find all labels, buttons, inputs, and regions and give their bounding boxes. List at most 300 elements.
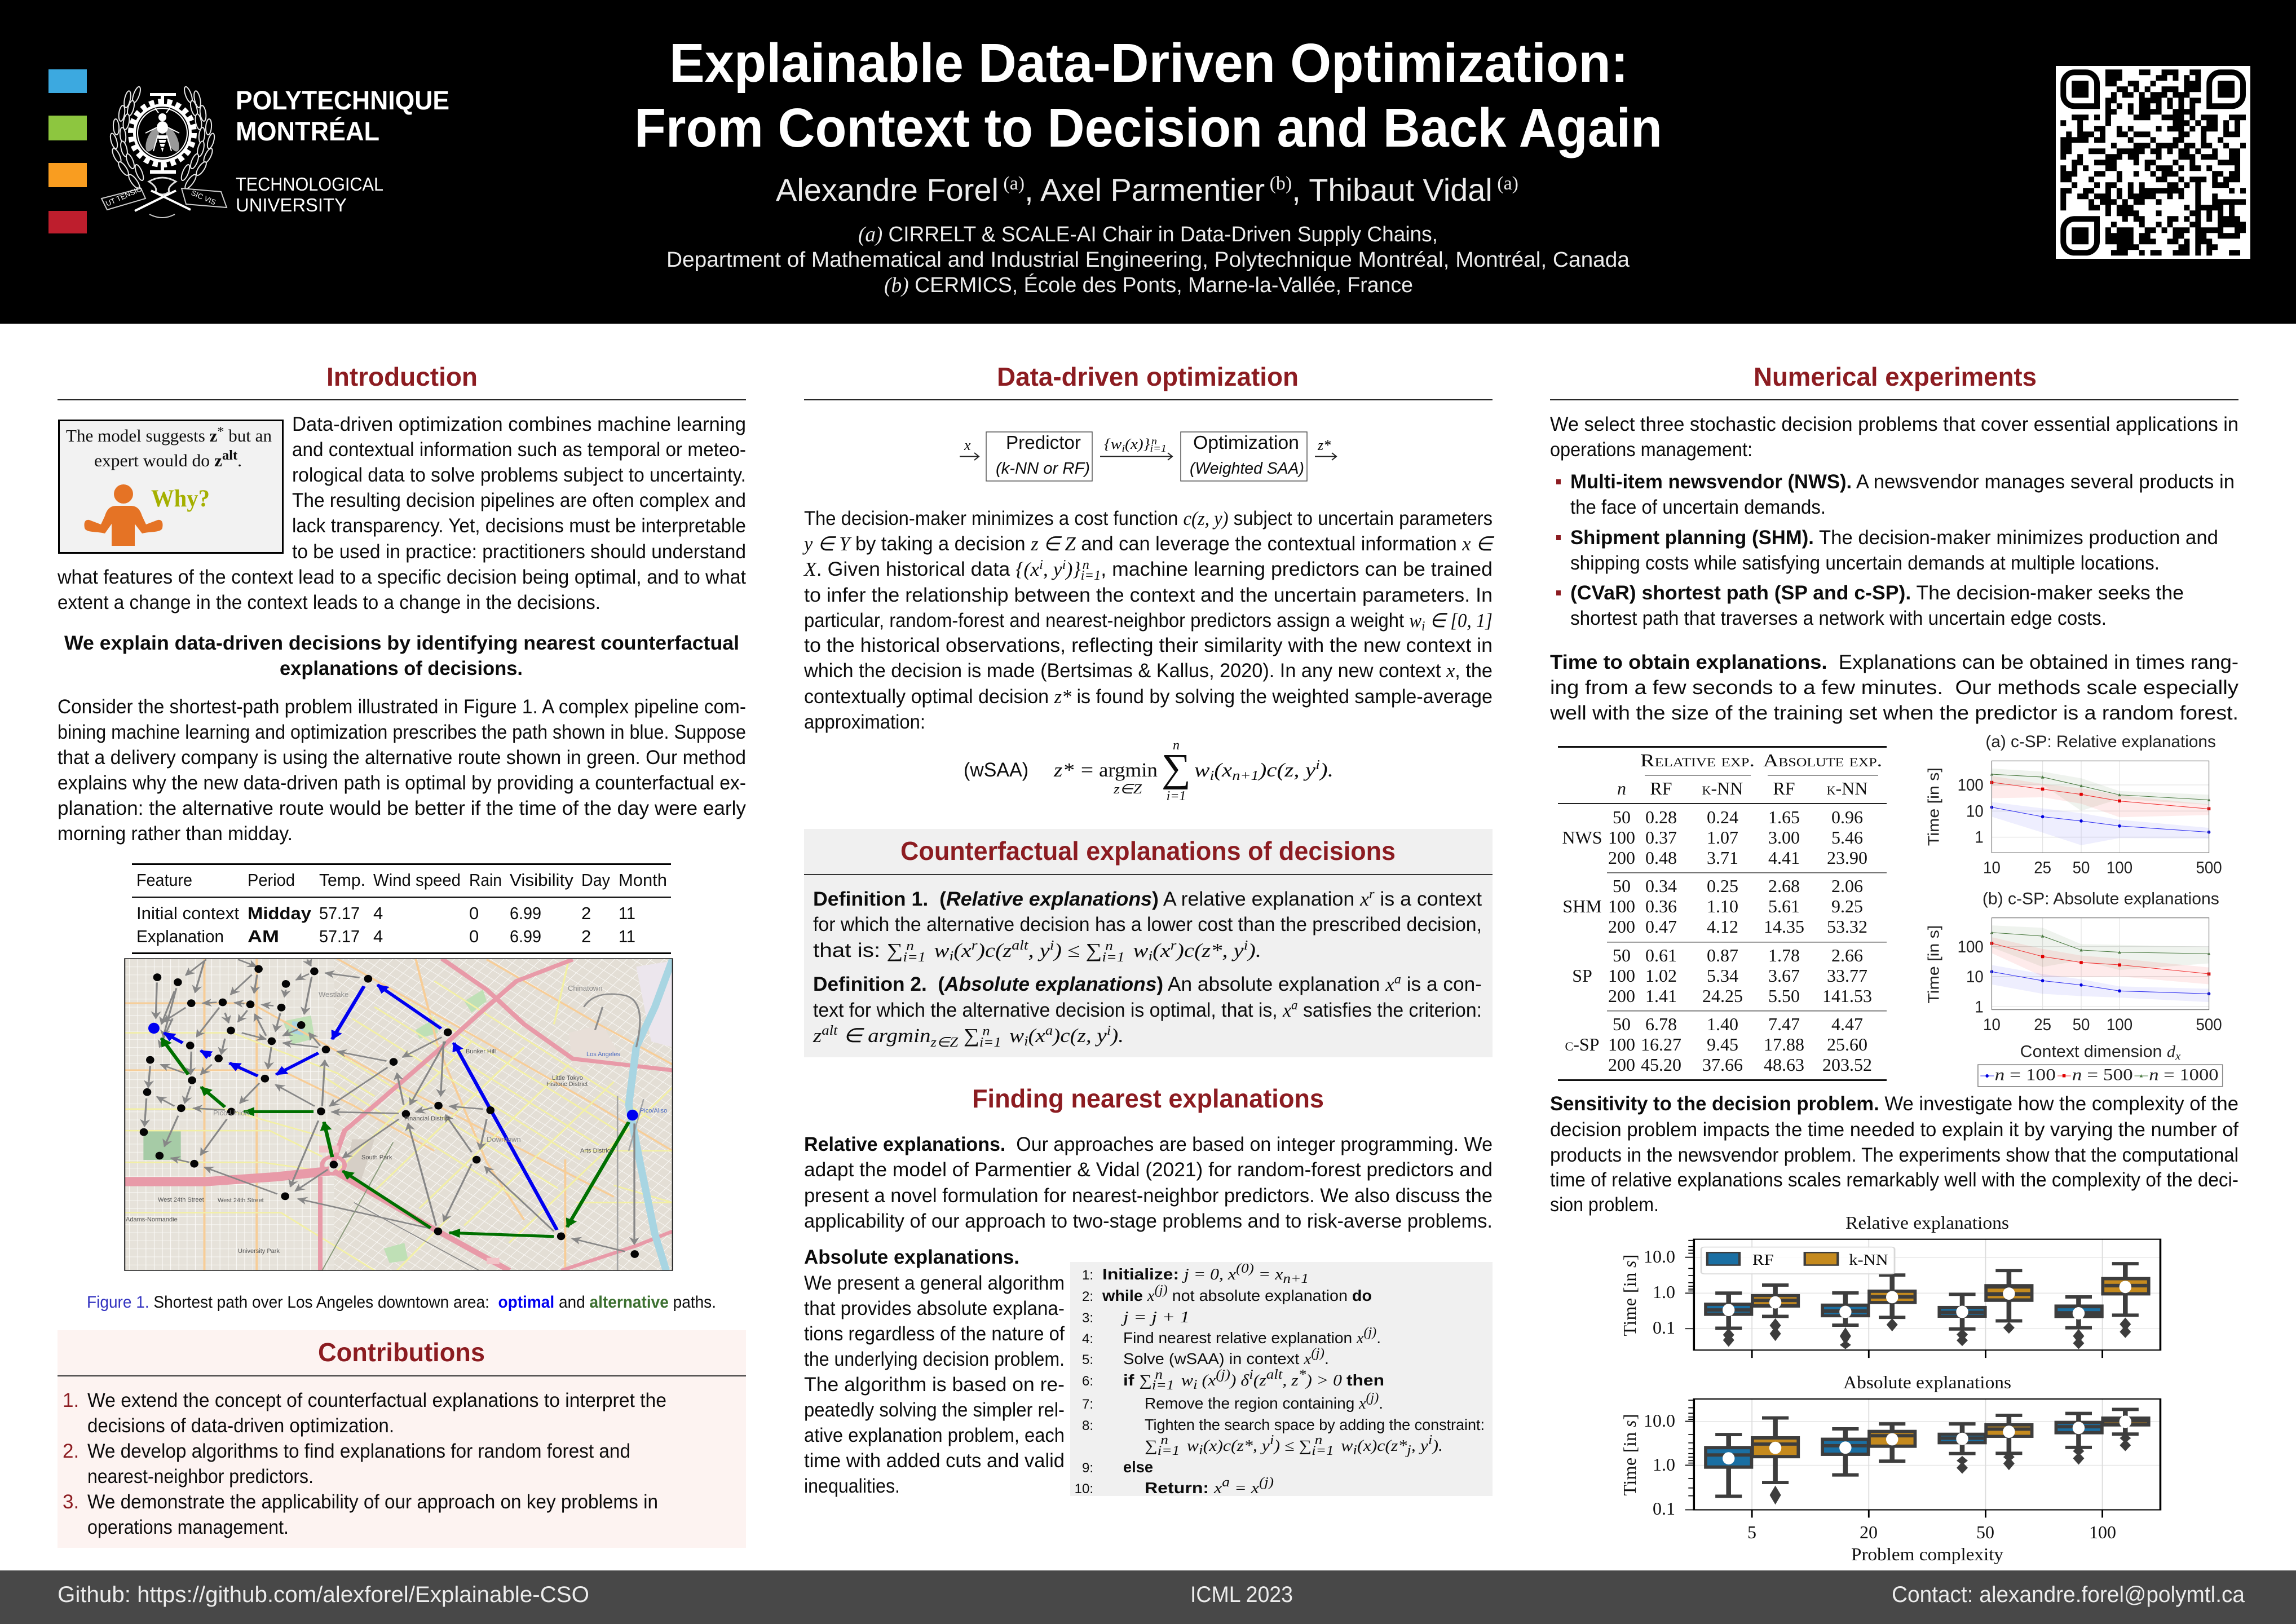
table: feature contexts: 0 xyxy=(469,903,479,923)
algorithm box: n+1 xyxy=(1283,1272,1309,1286)
callout: why box: . xyxy=(237,451,242,470)
definition 1: is a context xyxy=(1375,888,1482,910)
text block: problem description: particular, random-forest and nearest-neighbor predictors assign a weight w xyxy=(804,610,1445,632)
heading: Data-driven optimization: Data-driven optimization xyxy=(997,362,1299,391)
algorithm box: w xyxy=(1177,1372,1193,1389)
chart a: relative explanations: 50 xyxy=(2073,859,2090,877)
numbered list: nearest-neighbor predictors. xyxy=(87,1466,314,1488)
numbered list: We extend the concept of counterfactual explanations to interpret the xyxy=(87,1389,666,1411)
table: computation times: 50 xyxy=(1613,1014,1631,1034)
definition 2: ∑ xyxy=(958,1025,979,1047)
text block: problem description: , xyxy=(1101,558,1106,580)
footer: Github: https://github.com/alexforel/Explainable-CSO xyxy=(58,1582,589,1607)
equation: wSAA xyxy=(964,738,1334,804)
text block: shortest path example: bining machine learning and optimization prescribes the path shown in blue. Suppose xyxy=(58,721,746,743)
definition 2: a xyxy=(1394,972,1401,987)
text block: sensitivity: Sensitivity to the decision problem. We investigate how the complexity of the xyxy=(1550,1093,2238,1115)
equation: wSAA: w xyxy=(1194,759,1207,781)
table: computation times: 0.61 xyxy=(1645,945,1677,965)
legend: sample size xyxy=(1978,1065,2223,1087)
text block: absolute explanations: tions regardless of the nature of xyxy=(804,1323,1065,1345)
table: computation times: 25.60 xyxy=(1827,1034,1867,1054)
table: computation times: 0.87 xyxy=(1707,945,1738,965)
algorithm box: ). xyxy=(1431,1437,1443,1455)
table: computation times: 1.78 xyxy=(1768,945,1800,965)
title: Explainable Data-Driven Optimization: xyxy=(669,32,1628,94)
algorithm box: = x xyxy=(1254,1266,1283,1283)
logo: emblem: UT TENSIO xyxy=(104,184,143,208)
table: computation times: 141.53 xyxy=(1822,986,1872,1006)
chart a: relative explanations: 100 xyxy=(2107,859,2132,877)
algorithm box: 7: xyxy=(1082,1397,1093,1412)
boxplots: problem complexity: 1.0 xyxy=(1653,1454,1675,1475)
text block: problem description: machine learning predictors can be trained xyxy=(1112,558,1485,580)
chart a: relative explanations: 1 xyxy=(1975,828,1984,847)
equation: wSAA: (x xyxy=(1214,759,1233,781)
algorithm box: i=1 xyxy=(1152,1378,1174,1393)
text block: shortest path example xyxy=(58,696,746,845)
text block: time to obtain explanations: well with the size of the training set when the predictor is a random forest. xyxy=(1549,702,2238,724)
pipeline diagram: Predictor xyxy=(1006,432,1081,453)
equation: wSAA: i xyxy=(1209,769,1214,783)
definition 2 xyxy=(813,972,1482,1050)
chart b: absolute explanations: 500 xyxy=(2196,1016,2222,1034)
pipeline diagram: (Weighted SAA) xyxy=(1190,460,1304,478)
table: computation times: 7.47 xyxy=(1768,1014,1800,1034)
definition 2: (x xyxy=(1028,1025,1045,1047)
chart a: relative explanations xyxy=(1925,732,2222,877)
table: feature contexts: 11 xyxy=(619,926,635,946)
definition 1: Definition 1. (Relative explanations) A relative explanation x xyxy=(813,888,1369,910)
map: Los Angeles downtown network: South Park xyxy=(361,1154,392,1161)
legend: sample size: n = 100 xyxy=(1995,1066,2056,1084)
boxplots: problem complexity: 0.1 xyxy=(1653,1317,1675,1338)
table: feature contexts: AM xyxy=(248,926,279,946)
algorithm box: i xyxy=(1270,1433,1274,1448)
algorithm box: . xyxy=(1379,1394,1383,1412)
boxplots: problem complexity: 0.1 xyxy=(1653,1498,1675,1519)
definition 2: is a con- xyxy=(1401,973,1482,995)
chart b: absolute explanations: Time [in s] xyxy=(1925,925,1942,1004)
equation: wSAA: n xyxy=(1173,738,1180,753)
algorithm box: i=1 xyxy=(1312,1444,1334,1458)
map: Los Angeles downtown network: Pico-Union xyxy=(213,1109,249,1117)
numbered list: We develop algorithms to find explanations for random forest and xyxy=(87,1440,630,1462)
algorithm box: i=1 xyxy=(1158,1444,1180,1458)
algorithm box: (x)c(z* xyxy=(1357,1437,1407,1455)
algorithm box: (x xyxy=(1198,1372,1216,1389)
table: computation times: c-SP xyxy=(1565,1034,1599,1054)
algorithm box: = x xyxy=(1230,1480,1260,1497)
text block: problem description: i xyxy=(1421,619,1425,634)
callout: why box xyxy=(59,421,283,553)
map: Los Angeles downtown network: Arts District xyxy=(580,1148,612,1154)
table: computation times: 4.12 xyxy=(1707,916,1738,937)
text block: sensitivity: sion problem. xyxy=(1550,1194,1659,1216)
table: feature contexts: Period xyxy=(248,870,295,890)
algorithm box: (x)c(z*, y xyxy=(1203,1437,1270,1455)
algorithm box: ) δ xyxy=(1229,1372,1249,1389)
legend: RF xyxy=(1752,1252,1774,1269)
algorithm box: 10: xyxy=(1075,1481,1093,1497)
equation: wSAA: i=1 xyxy=(1167,789,1186,804)
algorithm box: (z xyxy=(1253,1372,1266,1389)
chart: relative explanations boxplot xyxy=(1685,1239,2160,1358)
chart b: absolute explanations: 100 xyxy=(1958,938,1984,956)
map: Los Angeles downtown network: Historic District xyxy=(546,1081,588,1088)
legend: k-NN xyxy=(1849,1252,1888,1269)
table: computation times: NWS xyxy=(1562,827,1602,848)
numbered list: 3. xyxy=(63,1491,79,1513)
bullet list: problems: Shipment planning (SHM). The decision-maker minimizes production and xyxy=(1570,527,2218,549)
table: computation times: 200 xyxy=(1608,1054,1635,1075)
table: computation times: 0.28 xyxy=(1645,807,1677,827)
pipeline diagram: (x)} xyxy=(1125,436,1150,452)
text block: absolute explanations: Absolute explanations. xyxy=(804,1246,1019,1268)
text block: intro paragraph: The resulting decision pipelines are often complex and xyxy=(292,489,746,511)
means xyxy=(1723,1281,2131,1320)
chart b: absolute explanations: 1 xyxy=(1975,998,1984,1017)
pipeline diagram xyxy=(960,432,1336,481)
table: computation times: 0.47 xyxy=(1645,916,1677,937)
definition 1: for which the alternative decision has a lower cost than the prescribed decision, xyxy=(813,914,1482,935)
text block: problem description: , y xyxy=(1043,558,1062,580)
table: computation times: 0.36 xyxy=(1645,896,1677,916)
table: computation times: 33.77 xyxy=(1827,965,1867,986)
table: computation times: 1.65 xyxy=(1768,807,1800,827)
affiliations: (a) CIRRELT & SCALE-AI Chair in Data-Driven Supply Chains, xyxy=(858,223,1438,246)
algorithm box: j = j + 1 xyxy=(1121,1309,1190,1326)
authors: (b) xyxy=(1265,173,1292,194)
definition 1 xyxy=(813,887,1482,965)
algorithm box: 2: xyxy=(1082,1289,1093,1304)
definition 2: i xyxy=(1107,1023,1111,1038)
text block: shortest path example: planation: the alternative route would be better if the time of the day were early xyxy=(58,797,746,819)
definition 2: )c(z, y xyxy=(1052,1025,1107,1047)
definition 2: i xyxy=(1024,1034,1028,1049)
table: computation times: 50 xyxy=(1613,945,1631,965)
definition 1: (x xyxy=(953,939,972,961)
table: computation times: 200 xyxy=(1608,986,1635,1006)
table: computation times: 9.25 xyxy=(1831,896,1863,916)
table: feature contexts: Initial context xyxy=(136,903,239,923)
algorithm box: i xyxy=(1249,1367,1253,1382)
boxes xyxy=(1704,1277,2151,1318)
map: Los Angeles downtown network: Little Tokyo xyxy=(552,1075,583,1082)
table: computation times: 6.78 xyxy=(1645,1014,1677,1034)
text block: absolute explanations: The algorithm is based on re- xyxy=(804,1374,1065,1396)
algorithm box: (j) xyxy=(1216,1367,1230,1382)
table: feature contexts xyxy=(132,863,671,954)
table: computation times: 2.06 xyxy=(1831,876,1863,896)
table: computation times: 5.61 xyxy=(1768,896,1800,916)
table: computation times: 17.88 xyxy=(1764,1034,1804,1054)
chart a: relative explanations: 10 xyxy=(1983,859,2001,877)
algorithm box: i xyxy=(1353,1443,1357,1458)
definition 1: w xyxy=(1127,939,1149,961)
callout: why box: expert would do z xyxy=(94,451,222,470)
bullet list: problems: (CVaR) shortest path (SP and c-SP). The decision-maker seeks the xyxy=(1570,582,2184,604)
affiliations: Department of Mathematical and Industrial Engineering, Polytechnique Montréal, Montréal, Canada xyxy=(666,248,1630,272)
text block: problem description: to the historical observations, reflecting their similarity with the new context in xyxy=(804,634,1493,656)
table: feature contexts: 57.17 xyxy=(319,903,360,923)
footer: ICML 2023 xyxy=(1190,1582,1293,1607)
table: computation times: 200 xyxy=(1608,916,1635,937)
boxplots: problem complexity: 100 xyxy=(2089,1522,2116,1542)
boxplots: problem complexity xyxy=(1619,1212,2160,1564)
authors: Alexandre Forel xyxy=(776,172,999,208)
definition 2: z xyxy=(813,1025,821,1047)
text block: problem description: y ∈ Y by taking a decision z ∈ Z and can leverage the contextual information x ∈ xyxy=(802,533,1494,555)
definition 2: ∈ argmin xyxy=(838,1025,931,1047)
text block: absolute explanations: We present a general algorithm xyxy=(804,1272,1065,1294)
footer: Contact: alexandre.forel@polymtl.ca xyxy=(1892,1582,2245,1607)
equation: wSAA: (wSAA) xyxy=(964,759,1028,781)
definition 1: r xyxy=(1171,938,1177,953)
algorithm box: 5: xyxy=(1082,1352,1093,1367)
equation: wSAA: z* = xyxy=(1053,759,1094,781)
equation: wSAA: z∈Z xyxy=(1113,782,1142,797)
text block: problem description: which the decision is made (Bertsimas & Kallus, 2020). In any new context x, the xyxy=(803,660,1493,682)
table: computation times: 0.24 xyxy=(1707,807,1738,827)
definition 2: w xyxy=(1004,1025,1025,1047)
key message xyxy=(64,632,739,679)
algorithm box: Tighten the search space by adding the constraint: xyxy=(1145,1416,1485,1433)
text block: intro paragraph: Data-driven optimization combines machine learning xyxy=(292,413,746,435)
text block: problem description: n xyxy=(1083,558,1089,572)
algorithm box: 8: xyxy=(1082,1418,1093,1433)
algorithm box: not absolute explanation xyxy=(1168,1287,1352,1304)
table: computation times: Relative exp. xyxy=(1640,750,1755,770)
text block: sensitivity: products in the newsvendor problem. The experiments show that the computational xyxy=(1550,1144,2238,1166)
table: computation times: 100 xyxy=(1608,896,1635,916)
table: feature contexts: Month xyxy=(619,870,667,890)
chart a: relative explanations: 500 xyxy=(2196,859,2222,877)
definition 1: i xyxy=(1244,938,1248,953)
table: computation times: 100 xyxy=(1608,827,1635,848)
definition 1: ) ≤ ∑ xyxy=(1053,939,1102,961)
text block: relative explanations: applicability of our approach to two-stage problems and to risk-averse problems. xyxy=(804,1210,1493,1232)
algorithm box: Find nearest relative explanation x xyxy=(1123,1329,1363,1347)
chart a: relative explanations: Time [in s] xyxy=(1925,767,1942,846)
text block: intro paragraph: to be used in practice: practitioners should understand xyxy=(292,541,746,563)
heading: Finding nearest explanations: Finding nearest explanations xyxy=(972,1084,1324,1113)
definition 2: n xyxy=(982,1024,990,1039)
text block: absolute explanations xyxy=(804,1246,1065,1497)
heading: Contributions: Contributions xyxy=(318,1338,485,1367)
axis label: context dimension: Context dimension d xyxy=(2020,1043,2175,1061)
table: computation times: 14.35 xyxy=(1764,916,1804,937)
algorithm box: (j) xyxy=(1259,1475,1274,1490)
boxplots: problem complexity: Relative explanations xyxy=(1845,1212,2009,1233)
table: computation times: SP xyxy=(1572,965,1592,986)
panel: numerical experiments xyxy=(1549,362,2239,1564)
title: From Context to Decision and Back Again xyxy=(634,97,1662,158)
header band xyxy=(0,0,2296,324)
table: feature contexts: 57.17 xyxy=(319,926,360,946)
table: computation times: 200 xyxy=(1608,848,1635,868)
algorithm box: w xyxy=(1336,1437,1353,1455)
algorithm box: ∑ xyxy=(1145,1437,1156,1455)
bullet list: problems: the face of uncertain demands. xyxy=(1570,496,1826,518)
definition 1: i xyxy=(1148,949,1153,964)
table: feature contexts: 4 xyxy=(373,903,383,923)
QR code xyxy=(2056,66,2250,259)
boxplots: problem complexity: Time [in s] xyxy=(1619,1414,1640,1495)
definition 2: i=1 xyxy=(979,1035,1001,1050)
footer xyxy=(0,1570,2296,1624)
key message: We explain data-driven decisions by identifying nearest counterfactual xyxy=(64,632,739,654)
authors: , Thibaut Vidal xyxy=(1292,172,1493,208)
text block: sensitivity: decision problem impacts the time needed to explain it by varying the number of xyxy=(1550,1119,2238,1141)
table: computation times: SHM xyxy=(1562,896,1602,916)
legend: sample size: n = 500 xyxy=(2072,1066,2133,1084)
text block: relative explanations xyxy=(804,1133,1493,1232)
table: computation times: 4.47 xyxy=(1831,1014,1863,1034)
map: Los Angeles downtown network: University Park xyxy=(238,1248,280,1255)
table: feature contexts: 6.99 xyxy=(510,926,541,946)
table: computation times: 1.41 xyxy=(1645,986,1677,1006)
callout: why box: Why? xyxy=(151,486,210,512)
table: computation times: n xyxy=(1617,778,1626,798)
boxplots: problem complexity: 1.0 xyxy=(1653,1282,1675,1302)
map: Los Angeles downtown network: Bunker Hill xyxy=(466,1048,496,1055)
equation: wSAA: argmin xyxy=(1099,759,1158,781)
affiliations: (b) CERMICS, École des Ponts, Marne-la-Vallée, France xyxy=(884,273,1413,297)
algorithm box: n xyxy=(1160,1433,1168,1448)
table: computation times: 1.07 xyxy=(1707,827,1738,848)
table: computation times: k-NN xyxy=(1702,778,1743,798)
definition 1: , y xyxy=(1028,939,1050,961)
algorithm box: (j) xyxy=(1363,1325,1376,1340)
callout: why box: alt xyxy=(222,448,237,463)
title xyxy=(634,32,1662,158)
table: computation times: 2.66 xyxy=(1831,945,1863,965)
whiskers and caps xyxy=(1715,1262,2139,1349)
text block: intro paragraph: rological data to solve problems subject to uncertainty. xyxy=(292,464,746,486)
pipeline diagram: i=1 xyxy=(1150,443,1167,454)
text block: problem description: approximation: xyxy=(804,711,925,733)
boxplots: problem complexity: 10.0 xyxy=(1644,1410,1675,1431)
definition 2: a xyxy=(1045,1023,1053,1038)
boxplots: problem complexity: 50 xyxy=(1976,1522,1994,1542)
definition 1: i xyxy=(1050,938,1054,953)
text block: problems intro xyxy=(1550,413,2238,461)
table: computation times: RF xyxy=(1773,778,1795,798)
definition 2: a xyxy=(1291,998,1298,1013)
algorithm box: n xyxy=(1155,1367,1163,1382)
definition 1: )c(z*, y xyxy=(1175,939,1244,961)
line charts: c-SP xyxy=(1925,732,2223,1087)
algorithm box: Return: x xyxy=(1145,1479,1221,1497)
table: feature contexts: Wind speed xyxy=(373,870,461,890)
numbered list: We demonstrate the applicability of our approach on key problems in xyxy=(87,1491,658,1513)
text block: problems intro: We select three stochastic decision problems that cover essential applications in xyxy=(1550,413,2238,435)
table: computation times xyxy=(1558,746,1887,1081)
logo: wordmark: TECHNOLOGICAL xyxy=(236,174,383,195)
panel: counterfactual explanations xyxy=(804,829,1493,1057)
equation: wSAA: i xyxy=(1315,758,1320,773)
heading: Numerical experiments: Numerical experiments xyxy=(1754,362,2037,391)
definition 2: satisfies the criterion: xyxy=(1298,999,1482,1021)
algorithm box: j xyxy=(1405,1443,1411,1458)
numbered list: decisions of data-driven optimization. xyxy=(87,1415,394,1437)
algorithm box: alt xyxy=(1266,1367,1283,1382)
chart a: relative explanations: 10 xyxy=(1966,802,1984,821)
definition 1: n xyxy=(906,939,914,954)
definition 1: that is: ∑ xyxy=(813,939,900,961)
numbered list xyxy=(63,1389,666,1538)
definition 2: z∈Z xyxy=(930,1035,959,1050)
definition 1: alt xyxy=(1012,938,1029,953)
table: computation times: 0.25 xyxy=(1707,876,1738,896)
authors: (a) xyxy=(1493,173,1518,194)
table: computation times: 1.02 xyxy=(1645,965,1677,986)
text block: intro paragraph: what features of the context lead to a specific decision being optimal, and to what xyxy=(57,566,746,588)
text block: time to obtain explanations xyxy=(1549,651,2239,724)
algorithm box: Initialize: j = 0, x xyxy=(1102,1265,1230,1283)
chart b: absolute explanations: 50 xyxy=(2073,1016,2090,1034)
text block: absolute explanations: ative explanation problem, each xyxy=(804,1424,1065,1446)
text block: problem description: i=1 xyxy=(1081,568,1101,583)
table: computation times: 16.27 xyxy=(1641,1034,1681,1054)
text block: problem description: to infer the relationship between the context and the uncertain parameters. In xyxy=(804,584,1493,606)
authors: , Axel Parmentier xyxy=(1025,172,1265,208)
definition 1: )c(z xyxy=(976,939,1012,961)
logo: emblem xyxy=(101,86,227,218)
panel: introduction xyxy=(0,362,2296,1624)
algorithm box: 6: xyxy=(1082,1374,1093,1389)
boxplots: problem complexity: Time [in s] xyxy=(1619,1254,1640,1336)
chart b: absolute explanations: 10 xyxy=(1983,1016,2001,1034)
text block: problem description: contextually optimal decision z* is found by solving the weighted sample-average xyxy=(804,686,1493,708)
text block: absolute explanations: time with added cuts and valid xyxy=(804,1450,1065,1472)
algorithm box: Solve (wSAA) in context x xyxy=(1123,1350,1311,1368)
algorithm box: if ∑ xyxy=(1123,1371,1150,1389)
algorithm box xyxy=(1070,1261,1493,1497)
figure caption: Figure 1. Shortest path over Los Angeles downtown area: optimal and alternative paths. xyxy=(87,1293,716,1312)
table: computation times: 5.46 xyxy=(1831,827,1863,848)
text block: intro paragraph: extent a change in the context leads to a change in the decisions. xyxy=(58,592,601,614)
map: Los Angeles downtown network: Pico/Aliso xyxy=(640,1107,667,1114)
definition 2: alt xyxy=(822,1023,838,1038)
algorithm box: then xyxy=(1346,1371,1384,1389)
pipeline diagram: i xyxy=(1121,443,1125,454)
algorithm box: (j) xyxy=(1311,1346,1324,1361)
definition 2: ). xyxy=(1110,1025,1124,1047)
pipeline diagram: x xyxy=(964,437,971,453)
bullet list: problems: Multi-item newsvendor (NWS). A newsvendor manages several products in xyxy=(1570,471,2235,493)
text block: absolute explanations: inequalities. xyxy=(804,1475,900,1497)
boxplots: problem complexity: 5 xyxy=(1747,1522,1756,1542)
map: Los Angeles downtown network: Westlake xyxy=(319,990,348,999)
table: computation times: 37.66 xyxy=(1702,1054,1743,1075)
algorithm box: else xyxy=(1123,1458,1153,1476)
text block: absolute explanations: peatedly solving the simpler rel- xyxy=(804,1399,1065,1421)
table: computation times: 0.96 xyxy=(1831,807,1863,827)
authors: (a) xyxy=(999,173,1025,194)
table: feature contexts: Midday xyxy=(248,903,312,923)
algorithm box: i xyxy=(1428,1433,1432,1448)
algorithm box: , z xyxy=(1282,1372,1299,1389)
pipeline diagram: (k-NN or RF) xyxy=(996,460,1090,478)
algorithm box: (0) xyxy=(1236,1261,1254,1276)
chart b: absolute explanations: 25 xyxy=(2034,1016,2051,1034)
table: feature contexts: 0 xyxy=(469,926,479,946)
table: computation times: 48.63 xyxy=(1764,1054,1804,1075)
pipeline diagram: {w xyxy=(1104,436,1120,452)
text block: sensitivity xyxy=(1550,1093,2238,1216)
